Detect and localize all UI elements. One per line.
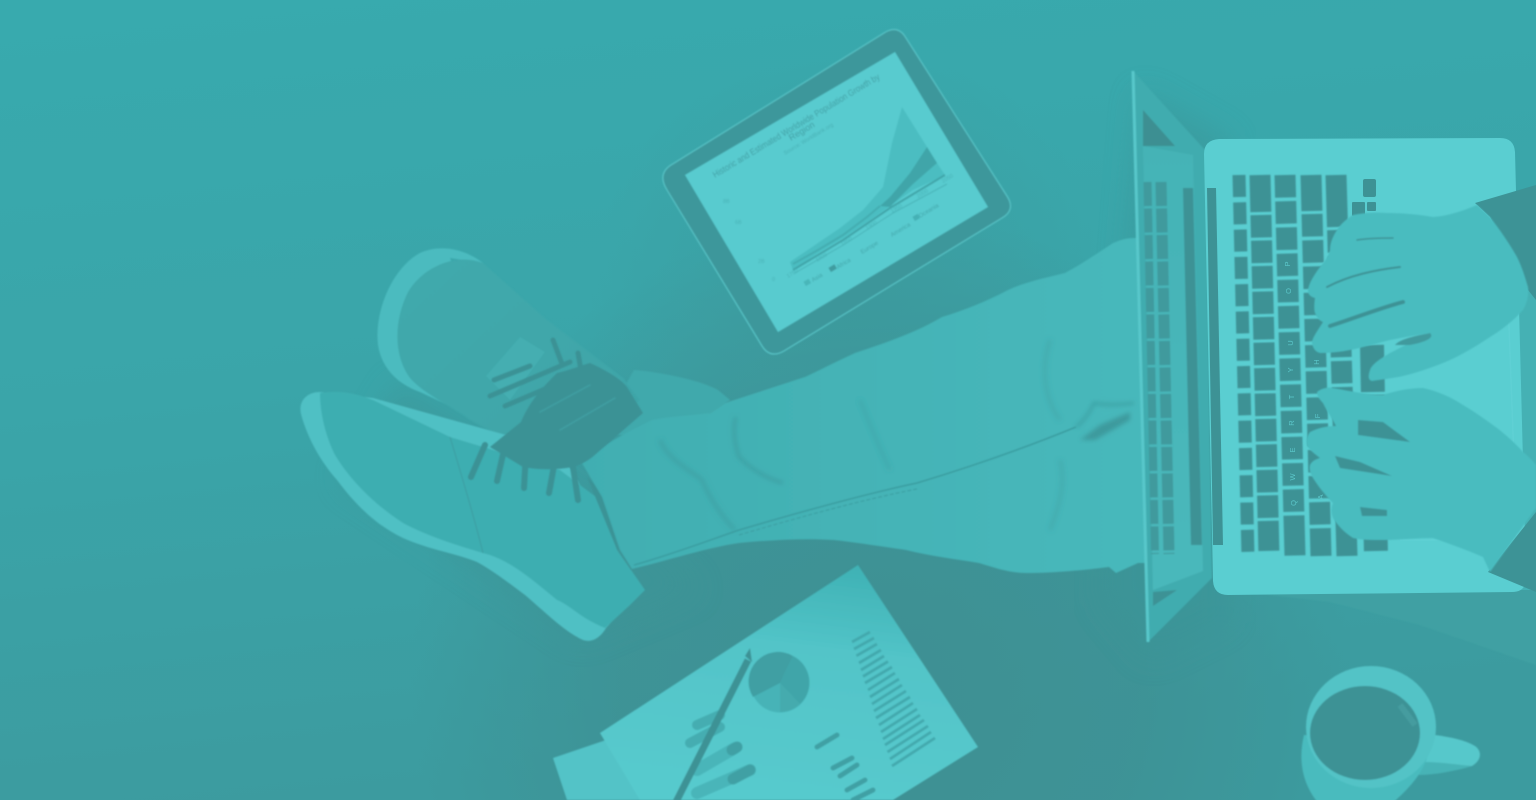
chart axis and legend labels	[723, 173, 955, 283]
pie chart	[749, 652, 810, 712]
shoe canvas	[320, 392, 645, 628]
key letters	[1283, 261, 1325, 506]
chart axis and legend labels: 2050	[941, 173, 955, 185]
key letters: T	[1287, 394, 1296, 399]
chart axis and legend labels: 6B	[735, 220, 742, 226]
key letters: U	[1286, 340, 1295, 346]
key letters: E	[1288, 447, 1297, 453]
sole	[300, 392, 640, 641]
key letters: Q	[1289, 500, 1298, 506]
coffee	[1310, 686, 1420, 780]
tablet with population chart: Africa	[836, 257, 853, 271]
back sheet	[553, 740, 652, 800]
main jeans leg	[582, 238, 1146, 573]
seam	[450, 437, 483, 553]
thigh below laptop	[1225, 585, 1536, 665]
tablet body	[663, 29, 1011, 354]
key letters: H	[1312, 359, 1321, 365]
upper hand	[1308, 205, 1528, 381]
lower bar charts	[690, 715, 873, 800]
arrow and top keys	[1352, 179, 1376, 216]
key letters: O	[1284, 288, 1293, 294]
paper with charts	[553, 565, 978, 800]
chart axis and legend labels: 2000	[916, 188, 930, 200]
mug body	[1301, 735, 1430, 800]
mug rim	[1306, 666, 1436, 788]
keyboard keys	[1239, 175, 1376, 556]
lower shoe	[300, 392, 645, 641]
chart areas	[790, 107, 947, 273]
chart axis and legend labels: 1900	[865, 220, 879, 232]
jeans seam	[634, 427, 1076, 565]
key letters: R	[1287, 420, 1296, 426]
front sheet	[600, 565, 978, 800]
jeans folds	[660, 340, 1134, 530]
chart axis and legend labels: 0	[772, 277, 775, 283]
upper shoe	[377, 248, 640, 470]
shoelaces	[471, 340, 643, 500]
tablet with population chart: America	[890, 222, 912, 239]
key letters: W	[1288, 473, 1297, 481]
lower hand	[1307, 388, 1536, 572]
finger gaps	[1327, 238, 1403, 326]
tablet with population chart: Europe	[860, 240, 880, 256]
tablet with population chart: Asia	[811, 272, 825, 284]
far leg ankle	[600, 370, 730, 440]
laptop base	[1204, 138, 1526, 595]
tablet screen	[685, 52, 988, 332]
tablet with population chart: Oceania	[918, 203, 941, 220]
right side jeans behind hands	[1515, 270, 1536, 590]
shoe upper	[397, 259, 640, 470]
laptop	[1133, 71, 1526, 642]
chart title: Source: WorldBank.org	[783, 122, 835, 157]
chart axis and legend labels: 1750	[786, 268, 800, 280]
trackpad	[1392, 300, 1517, 540]
tongue	[486, 337, 545, 400]
key letters: P	[1283, 261, 1292, 267]
key letters: Y	[1286, 367, 1295, 373]
tongue shadow	[587, 477, 618, 552]
chart axis and legend labels: 1800	[815, 252, 829, 264]
chart axis and legend labels: 1950	[890, 203, 904, 215]
key letters: A	[1316, 494, 1325, 500]
sleeve upper	[1475, 185, 1536, 300]
key letters: F	[1313, 413, 1322, 418]
chart axis and legend labels: 2B	[758, 259, 765, 265]
hinge bar	[1207, 188, 1223, 545]
pencil	[676, 660, 748, 800]
sleeve lower	[1488, 512, 1536, 592]
finger gaps	[1335, 420, 1410, 516]
shoe sole rim	[377, 248, 500, 420]
chart title: Region	[787, 119, 816, 143]
chart axis and legend labels: 8B	[723, 199, 730, 205]
mug handle	[1415, 735, 1480, 774]
stripe bar chart	[852, 632, 935, 766]
tablet with population chart	[663, 29, 1011, 354]
laptop screen lid	[1133, 71, 1212, 642]
chart axis and legend labels: 1850	[840, 236, 854, 248]
chart title: Historic and Estimated Worldwide Population Growth by	[711, 72, 882, 180]
coffee mug	[1301, 666, 1480, 800]
